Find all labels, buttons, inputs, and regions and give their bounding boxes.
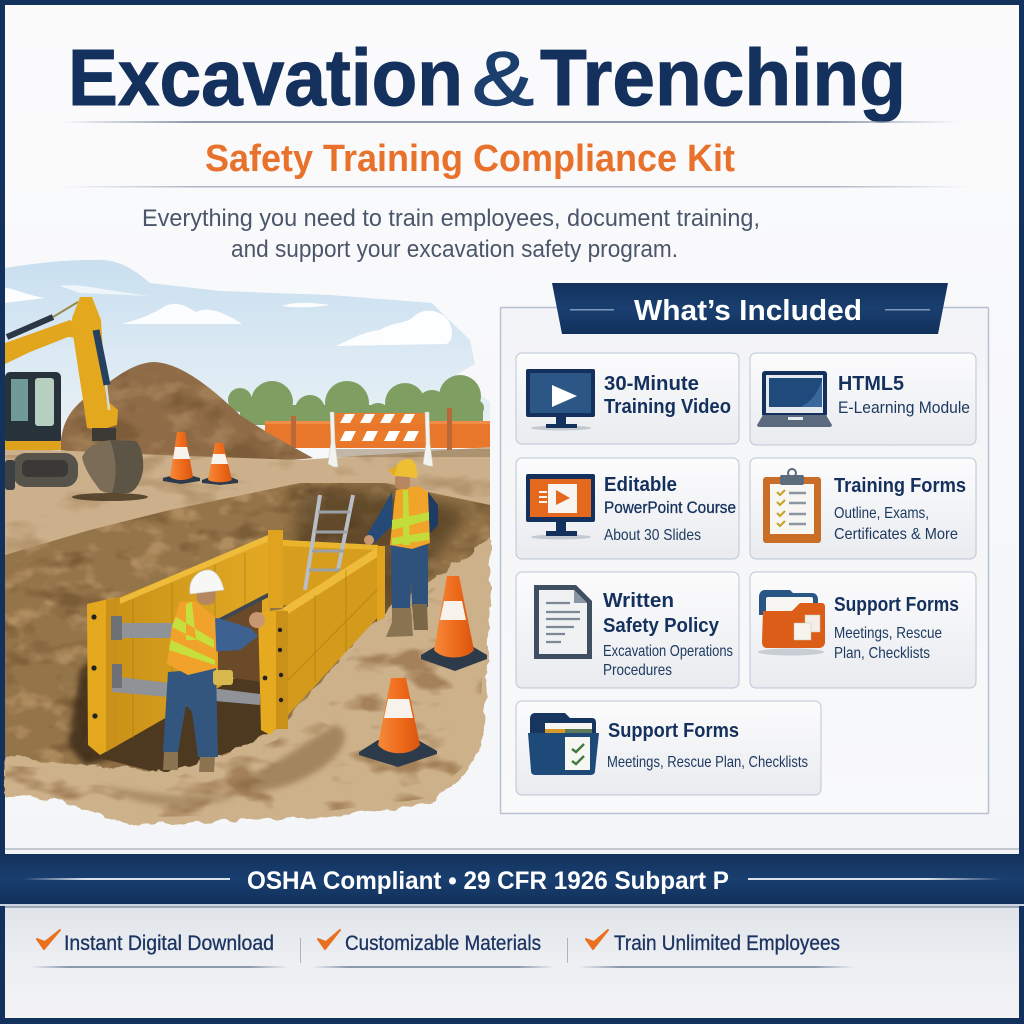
card: training forms: Outline, Exams, — [834, 505, 929, 522]
sky — [5, 260, 490, 460]
excavator stick — [72, 297, 118, 430]
compliance band: OSHA Compliant • 29 CFR 1926 Subpart P — [247, 867, 729, 895]
card: support forms orange folder: Meetings, Rescue — [834, 625, 942, 642]
cones front pair — [359, 576, 487, 767]
card: training forms — [750, 458, 976, 559]
icon: monitor with slide — [526, 474, 595, 540]
benefit: unlimited employees: Train Unlimited Employees — [614, 932, 840, 955]
card: written safety policy — [516, 572, 739, 688]
card: support forms orange folder: Support Forms — [834, 594, 959, 616]
excavator tracks — [5, 453, 78, 490]
card: written safety policy: Safety Policy — [603, 615, 720, 637]
orange fence — [265, 408, 490, 453]
icon: blue folder — [528, 713, 599, 775]
card: training video: Training Video — [604, 396, 731, 418]
excavator — [5, 297, 148, 501]
ladder — [305, 495, 353, 590]
benefit: customizable materials: Customizable Materials — [345, 932, 541, 955]
trees — [228, 375, 484, 427]
icon: document — [534, 585, 592, 659]
icon: laptop — [757, 371, 832, 427]
description text: and support your excavation safety program. — [231, 236, 678, 263]
card: html5 module — [750, 353, 976, 445]
excavator boom — [5, 320, 80, 364]
card: powerpoint course: PowerPoint Course — [604, 498, 736, 517]
card: support forms orange folder — [750, 572, 976, 688]
cones back pair — [163, 432, 238, 485]
card: training video: 30-Minute — [604, 373, 699, 395]
subtitle: Safety Training Compliance Kit — [205, 138, 735, 180]
road barricade — [328, 412, 433, 467]
card: support forms blue folder — [516, 701, 821, 795]
worker in the trench — [163, 570, 265, 772]
title: Excavation — [68, 33, 463, 122]
worker on the right — [364, 459, 438, 637]
trench — [5, 483, 490, 775]
heading banner — [552, 283, 948, 334]
title: & — [472, 37, 534, 122]
ground near side — [5, 540, 490, 826]
card: powerpoint course: Editable — [604, 474, 677, 496]
excavator bucket — [72, 428, 148, 501]
illustration: excavation site — [5, 260, 490, 826]
excavator cab — [5, 372, 61, 450]
card: written safety policy: Excavation Operations — [603, 643, 733, 660]
panel: what's included — [500, 283, 988, 814]
card: support forms blue folder: Meetings, Rescue Plan, Checklists — [607, 754, 808, 771]
icon: clipboard — [763, 469, 821, 543]
footer benefits strip — [5, 906, 1019, 1018]
icon: orange folder — [758, 590, 825, 656]
description text: Everything you need to train employees, document training, — [142, 205, 760, 232]
card: support forms orange folder: Plan, Checklists — [834, 645, 930, 662]
title: Trenching — [540, 33, 906, 122]
compliance band — [0, 848, 1024, 906]
card: html5 module: HTML5 — [838, 373, 904, 395]
heading banner: What’s Included — [634, 295, 862, 327]
icon: monitor with play — [526, 369, 595, 430]
trench box left panel — [87, 530, 283, 755]
dirt mound — [60, 362, 313, 462]
card: html5 module: E-Learning Module — [838, 398, 970, 417]
card: powerpoint course — [516, 458, 739, 559]
card: training video — [516, 353, 739, 444]
card: training forms: Training Forms — [834, 475, 966, 497]
benefit: instant download: Instant Digital Download — [64, 932, 274, 955]
card: written safety policy: Procedures — [603, 662, 672, 679]
card: training forms: Certificates & More — [834, 526, 958, 543]
card: written safety policy: Written — [603, 590, 674, 612]
trench box right panel — [258, 546, 385, 735]
trench box back panel — [283, 540, 378, 610]
ground far side — [5, 447, 490, 565]
card: powerpoint course: About 30 Slides — [604, 527, 701, 544]
title — [68, 33, 906, 122]
card: support forms blue folder: Support Forms — [608, 720, 739, 742]
description text — [142, 205, 760, 263]
